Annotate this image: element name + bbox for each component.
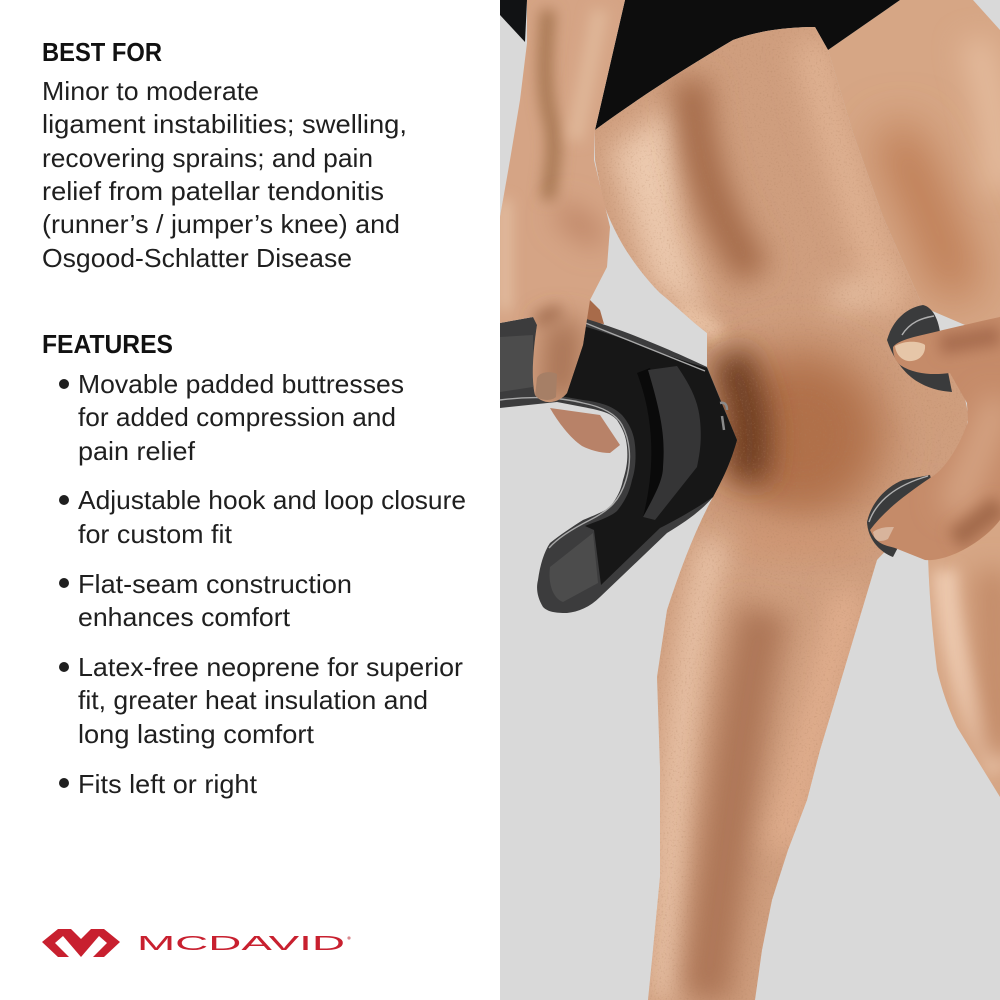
panel: white text column <box>0 0 500 1000</box>
brace stitched seam <box>500 322 705 548</box>
arm and hand holding brace <box>500 0 630 410</box>
front leg <box>590 20 990 1000</box>
feature: flat seam <box>59 569 352 632</box>
hook and loop tab lower <box>550 533 598 602</box>
text block: best for description: relief from patellar tendonitis <box>42 176 384 206</box>
skin pores <box>590 20 990 1000</box>
text block: best for description: Osgood-Schlatter Disease <box>42 243 352 273</box>
feature: flat seam: enhances comfort <box>78 602 291 632</box>
text block: best for description: ligament instabilities; swelling, <box>42 109 407 139</box>
fingers behind brace <box>550 408 620 453</box>
shorts <box>500 0 900 130</box>
logo: McDavid <box>42 929 351 957</box>
small finger above brace <box>583 298 604 324</box>
brace outer rim <box>500 317 737 613</box>
list: features <box>59 369 466 799</box>
feature: movable buttresses: pain relief <box>78 436 196 466</box>
feature: movable buttresses <box>59 369 404 466</box>
feature: latex-free neoprene: Latex-free neoprene for superior <box>78 652 463 682</box>
registered mark <box>347 936 351 940</box>
knee brace <box>500 317 737 613</box>
finger nail <box>873 527 894 541</box>
text block: best for description <box>42 76 407 273</box>
feature: movable buttresses: for added compression and <box>78 402 396 432</box>
heading: features: FEATURES <box>42 329 173 359</box>
thumbnail <box>535 372 557 400</box>
calf shading <box>740 540 860 545</box>
brace dark neoprene body <box>560 326 737 585</box>
lower buttress <box>867 475 932 557</box>
buttress shadow <box>637 368 666 520</box>
brace logo marking <box>720 403 727 430</box>
text block: best for description: Minor to moderate <box>42 76 259 106</box>
thigh shading <box>610 100 710 330</box>
padded buttress on brace <box>643 366 701 520</box>
heading: best for: BEST FOR <box>42 37 162 67</box>
text block: best for description: recovering sprains; and pain <box>42 143 373 173</box>
feature: movable buttresses: Movable padded buttresses <box>78 369 404 399</box>
feature: fits left or right: Fits left or right <box>78 769 258 799</box>
feature: adjustable closure: Adjustable hook and loop closure <box>78 485 466 515</box>
icon: McDavid emblem <box>42 929 120 957</box>
back leg <box>820 0 1000 800</box>
feature: latex-free neoprene: long lasting comfort <box>78 719 315 749</box>
right hand with buttresses <box>870 310 1000 570</box>
feature: flat seam: Flat-seam construction <box>78 569 352 599</box>
upper buttress <box>887 305 952 392</box>
text block: best for description: (runner’s / jumper’s knee) and <box>42 209 400 239</box>
thumbnail <box>895 342 925 361</box>
logo wordmark: MCDAVID <box>137 933 345 955</box>
hook and loop tab left <box>500 335 533 392</box>
feature: latex-free neoprene: fit, greater heat insulation and <box>78 685 428 715</box>
knee shading <box>715 350 885 520</box>
photo: knee support being fitted <box>500 0 1000 1000</box>
feature: adjustable closure: for custom fit <box>78 519 233 549</box>
feature: adjustable closure <box>59 485 466 549</box>
feature: latex-free neoprene <box>59 652 463 749</box>
